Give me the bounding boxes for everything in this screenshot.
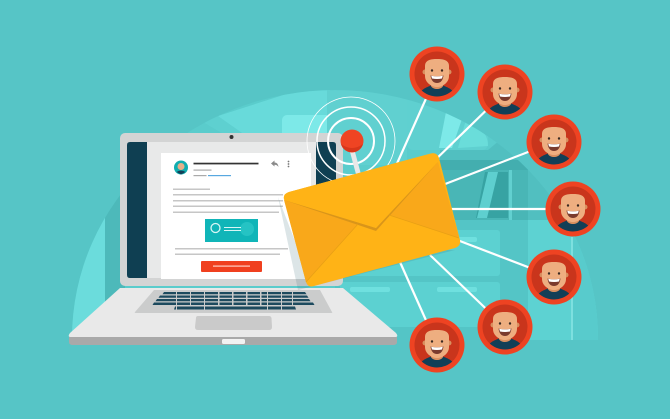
flap [284,153,438,228]
envelope [284,153,460,286]
sender avatar [174,160,188,174]
right fold [389,162,459,238]
illustration: email sent to many recipients [68,46,600,372]
laptop screen inner [127,142,336,278]
email page [161,153,311,279]
left sidebar [127,142,147,278]
signal rings [307,97,395,185]
body text lines [173,188,288,255]
connector lines [395,74,573,345]
laptop base [69,288,397,337]
laptop [69,133,397,345]
laptop screen bezel [120,133,343,286]
email header lines [194,163,258,176]
red button [201,261,262,272]
background: dome building [72,90,575,340]
avatars [410,46,600,372]
red pin [340,130,364,178]
keyboard deck [135,290,332,313]
left fold [284,200,358,282]
camera [230,135,234,139]
flap shadow [284,162,438,231]
base front edge [69,337,397,345]
right sidebar [316,142,336,200]
reply icon [271,160,278,167]
envelope body [284,153,460,286]
teal banner [205,219,258,242]
keys [152,292,314,310]
menu dots [288,161,289,167]
base notch [222,339,245,344]
trackpad [195,316,272,330]
lower fold lines [306,215,459,282]
envelope shadow [278,197,455,290]
